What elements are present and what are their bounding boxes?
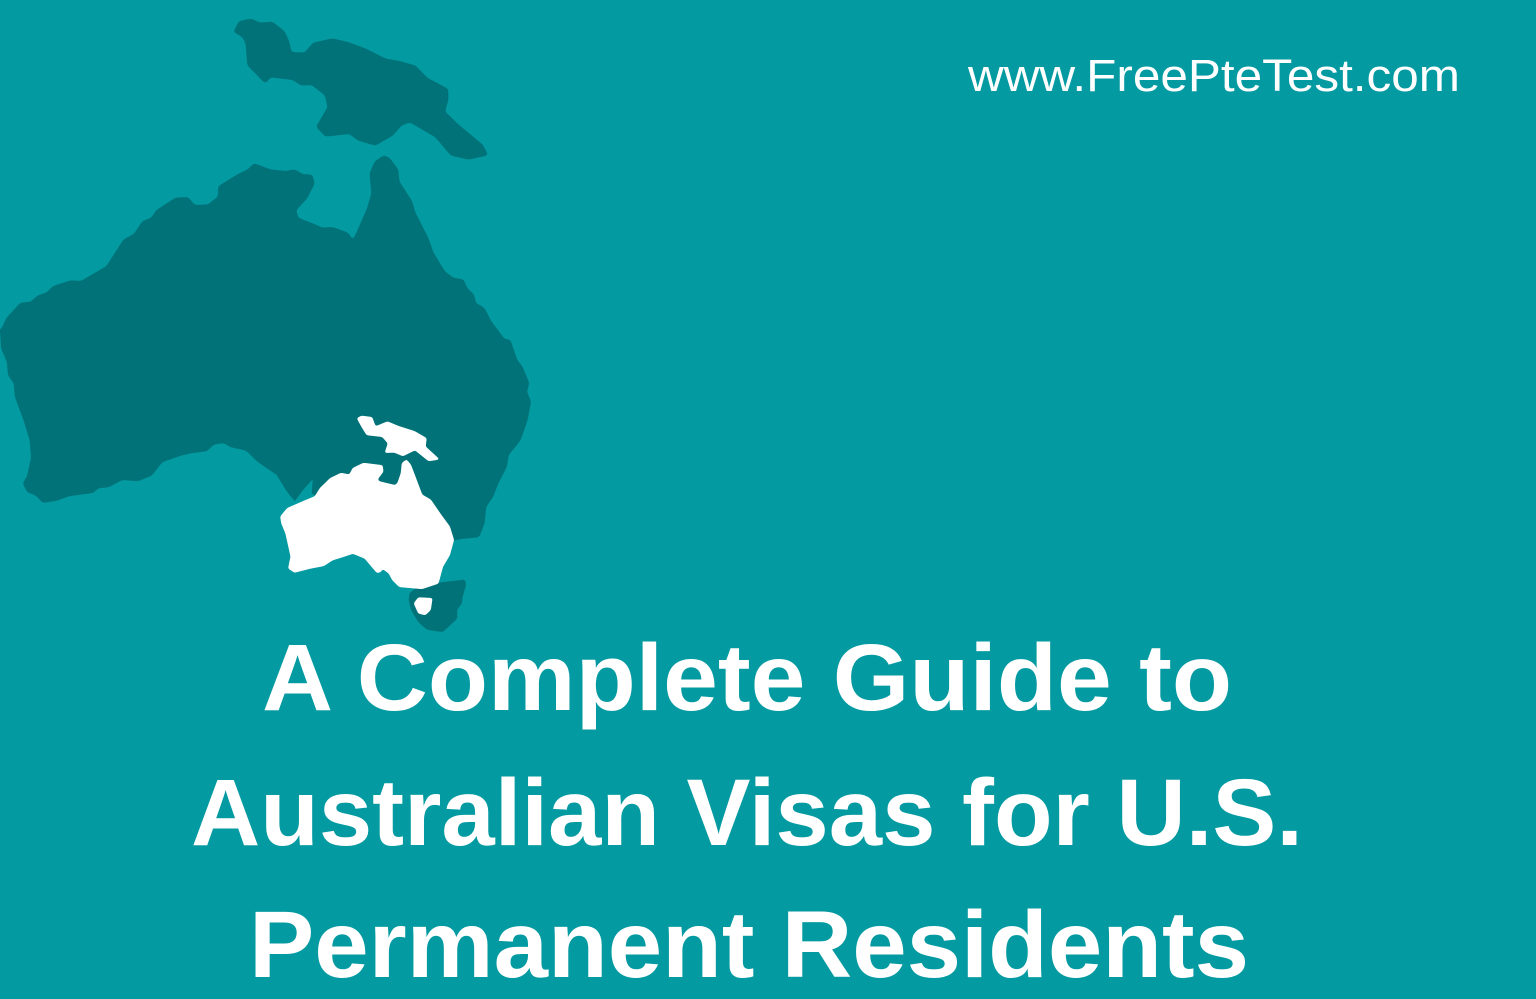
title line 1: A Complete Guide to [262, 625, 1232, 731]
map: Australia and surrounding region [0, 19, 530, 632]
icon: Australia dark silhouette [0, 156, 530, 553]
icon: New Guinea dark silhouette [234, 19, 487, 159]
dark landmasses [0, 19, 530, 632]
title [191, 625, 1303, 998]
title line 3: Permanent Residents [249, 892, 1249, 998]
icon: white Tasmania [414, 598, 432, 615]
icon: white New Guinea [357, 416, 439, 461]
title line 2: Australian Visas for U.S. [191, 760, 1303, 866]
website URL: www.FreePteTest.com [967, 50, 1460, 101]
icon: Tasmania dark silhouette [409, 580, 466, 632]
teal wedge in the south coast [269, 473, 316, 520]
white landmasses [281, 416, 454, 615]
icon: white Australia mainland [281, 460, 454, 589]
